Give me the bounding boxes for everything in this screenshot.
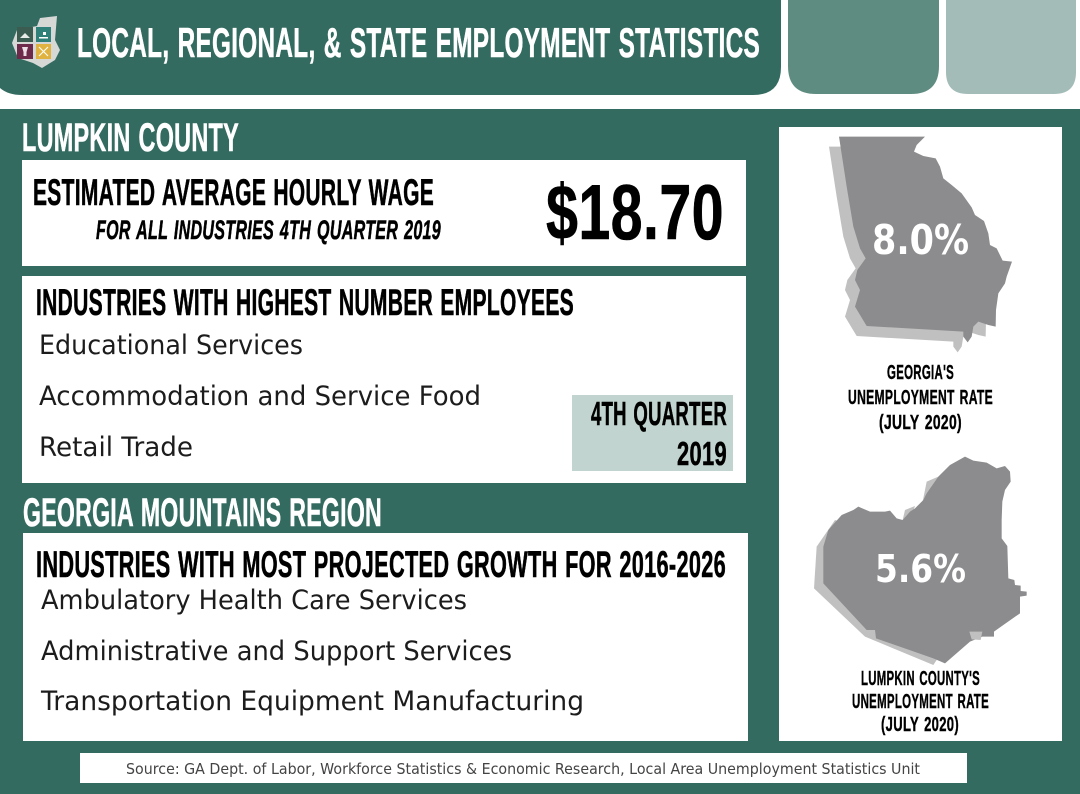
Lumpkin rate value: 5.6% <box>875 547 966 591</box>
label: Georgia unemployment rate: (JULY 2020) <box>879 412 962 434</box>
source note <box>80 753 967 783</box>
wage value: $18.70 <box>546 168 724 256</box>
label: Georgia unemployment rate: UNEMPLOYMENT RATE <box>848 387 993 409</box>
heading: Lumpkin County: LUMPKIN COUNTY <box>22 116 239 160</box>
list item: Ambulatory Health Care Services <box>41 585 467 616</box>
source note: Source: GA Dept. of Labor, Workforce Statistics & Economic Research, Local Area Unemployment Statistics Unit <box>126 760 920 778</box>
label: Georgia unemployment rate: GEORGIA'S <box>887 362 954 384</box>
label: Lumpkin County unemployment rate <box>852 668 989 736</box>
wage subheading: FOR ALL INDUSTRIES 4TH QUARTER 2019 <box>96 215 441 245</box>
wage heading: ESTIMATED AVERAGE HOURLY WAGE <box>33 172 434 213</box>
logo: county emblem <box>12 16 60 68</box>
panel heading: INDUSTRIES WITH HIGHEST NUMBER EMPLOYEES <box>36 282 574 323</box>
callout: 4th quarter 2019: 4TH QUARTER <box>591 395 727 432</box>
map: Lumpkin County <box>814 457 1027 665</box>
decorative header tab: light green <box>946 0 1076 94</box>
panel: unemployment rates <box>779 127 1062 741</box>
panel: industries with highest number of employees <box>22 276 746 483</box>
Georgia rate value: 8.0% <box>872 216 969 264</box>
map: Georgia <box>829 137 1012 352</box>
header banner <box>0 0 781 95</box>
callout: 4th quarter 2019: 2019 <box>677 435 727 472</box>
list item: Retail Trade <box>39 432 193 463</box>
label: Georgia unemployment rate <box>848 362 993 434</box>
callout: 4th quarter 2019 <box>572 395 733 472</box>
heading: Georgia Mountains Region: GEORGIA MOUNTAINS REGION <box>23 491 382 535</box>
label: Lumpkin County unemployment rate: LUMPKIN COUNTY'S <box>861 668 980 690</box>
list item: Administrative and Support Services <box>41 636 512 667</box>
panel: average hourly wage <box>22 160 746 266</box>
list item: Educational Services <box>39 330 303 361</box>
list item: Accommodation and Service Food <box>39 381 481 412</box>
list item: Transportation Equipment Manufacturing <box>40 686 584 717</box>
panel: projected growth industries <box>23 533 748 741</box>
decorative header tab: mid green <box>788 0 939 94</box>
label: Lumpkin County unemployment rate: (JULY 2020) <box>881 714 959 736</box>
